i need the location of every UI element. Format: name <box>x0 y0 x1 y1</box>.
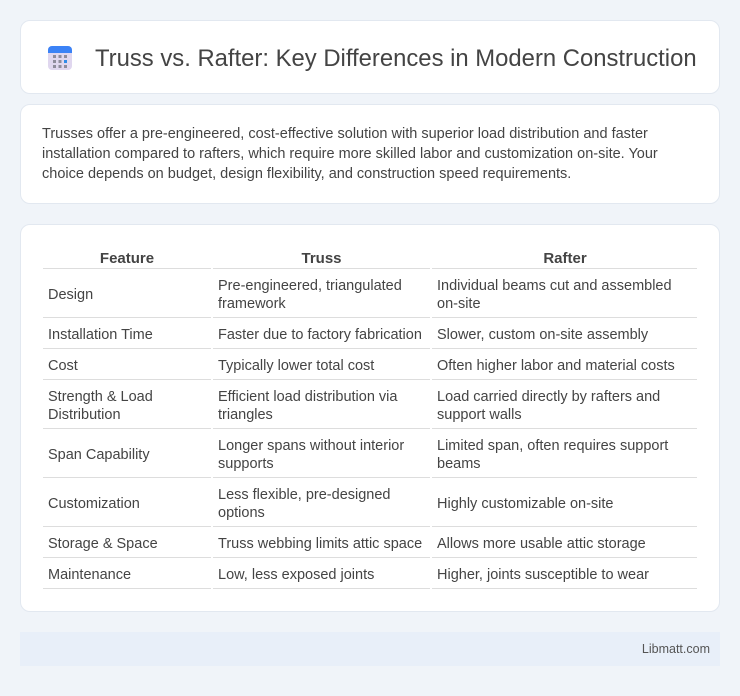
row: Span Capability: beams <box>437 456 481 472</box>
summary text: installation compared to rafters, which require more skilled labor and customization on-site. Your <box>42 146 658 162</box>
row: Storage & Space: Allows more usable attic storage <box>437 536 646 552</box>
row: Design: Individual beams cut and assembled <box>437 278 672 294</box>
row: Design: Design <box>48 287 93 303</box>
row: Strength & Load Distribution: Load carried directly by rafters and <box>437 389 660 405</box>
summary text: Trusses offer a pre-engineered, cost-effective solution with superior load distribution and faster <box>42 126 648 142</box>
row: Maintenance: Low, less exposed joints <box>218 567 374 583</box>
row: Span Capability: Longer spans without interior <box>218 438 404 454</box>
row: Installation Time: Installation Time <box>48 327 153 343</box>
row: Installation Time: Slower, custom on-site assembly <box>437 327 648 343</box>
row: Cost <box>48 358 675 374</box>
row: Customization: Highly customizable on-site <box>437 496 614 512</box>
footer bar <box>20 632 720 666</box>
row: Customization <box>48 487 614 521</box>
row: Cost: Typically lower total cost <box>218 358 374 374</box>
row: Customization: Less flexible, pre-designed <box>218 487 390 503</box>
column header: Rafter: Rafter <box>543 250 587 267</box>
row: Span Capability <box>48 438 668 472</box>
row: Design <box>48 278 672 312</box>
row: Customization: Customization <box>48 496 140 512</box>
row: Strength & Load Distribution: Distribution <box>48 407 121 423</box>
row: Customization: options <box>218 505 265 521</box>
row: Strength & Load Distribution: Strength & Load <box>48 389 153 405</box>
row: Design: framework <box>218 296 286 312</box>
row: Storage & Space: Storage & Space <box>48 536 158 552</box>
row: Strength & Load Distribution: Efficient load distribution via <box>218 389 397 405</box>
row: Cost: Often higher labor and material costs <box>437 358 675 374</box>
panel: header <box>20 20 720 94</box>
row: Design: on-site <box>437 296 481 312</box>
row: Maintenance: Higher, joints susceptible to wear <box>437 567 649 583</box>
row: Strength & Load Distribution <box>48 389 660 423</box>
column header: Truss: Truss <box>301 250 342 267</box>
row: Installation Time <box>48 327 648 343</box>
row: Installation Time: Faster due to factory fabrication <box>218 327 422 343</box>
row: Cost: Cost <box>48 358 78 374</box>
row: Strength & Load Distribution: support walls <box>437 407 522 423</box>
row: Span Capability: supports <box>218 456 274 472</box>
column header: Feature: Feature <box>100 250 154 267</box>
summary text: choice depends on budget, design flexibility, and construction speed requirements. <box>42 166 571 182</box>
row: Storage & Space: Truss webbing limits attic space <box>218 536 422 552</box>
summary text <box>42 126 658 182</box>
footer text: Libmatt.com: Libmatt.com <box>642 642 710 656</box>
panel: summary <box>20 104 720 204</box>
row: Design: Pre-engineered, triangulated <box>218 278 402 294</box>
row: Strength & Load Distribution: triangles <box>218 407 273 423</box>
title: Truss vs. Rafter: Key Differences in Modern Construction <box>95 45 697 72</box>
row: Maintenance <box>48 567 649 583</box>
row: Span Capability: Span Capability <box>48 447 150 463</box>
row: Span Capability: Limited span, often requires support <box>437 438 668 454</box>
icon: calendar <box>48 46 72 70</box>
row: Storage & Space <box>48 536 646 552</box>
panel: comparison table <box>20 224 720 612</box>
row: Maintenance: Maintenance <box>48 567 131 583</box>
